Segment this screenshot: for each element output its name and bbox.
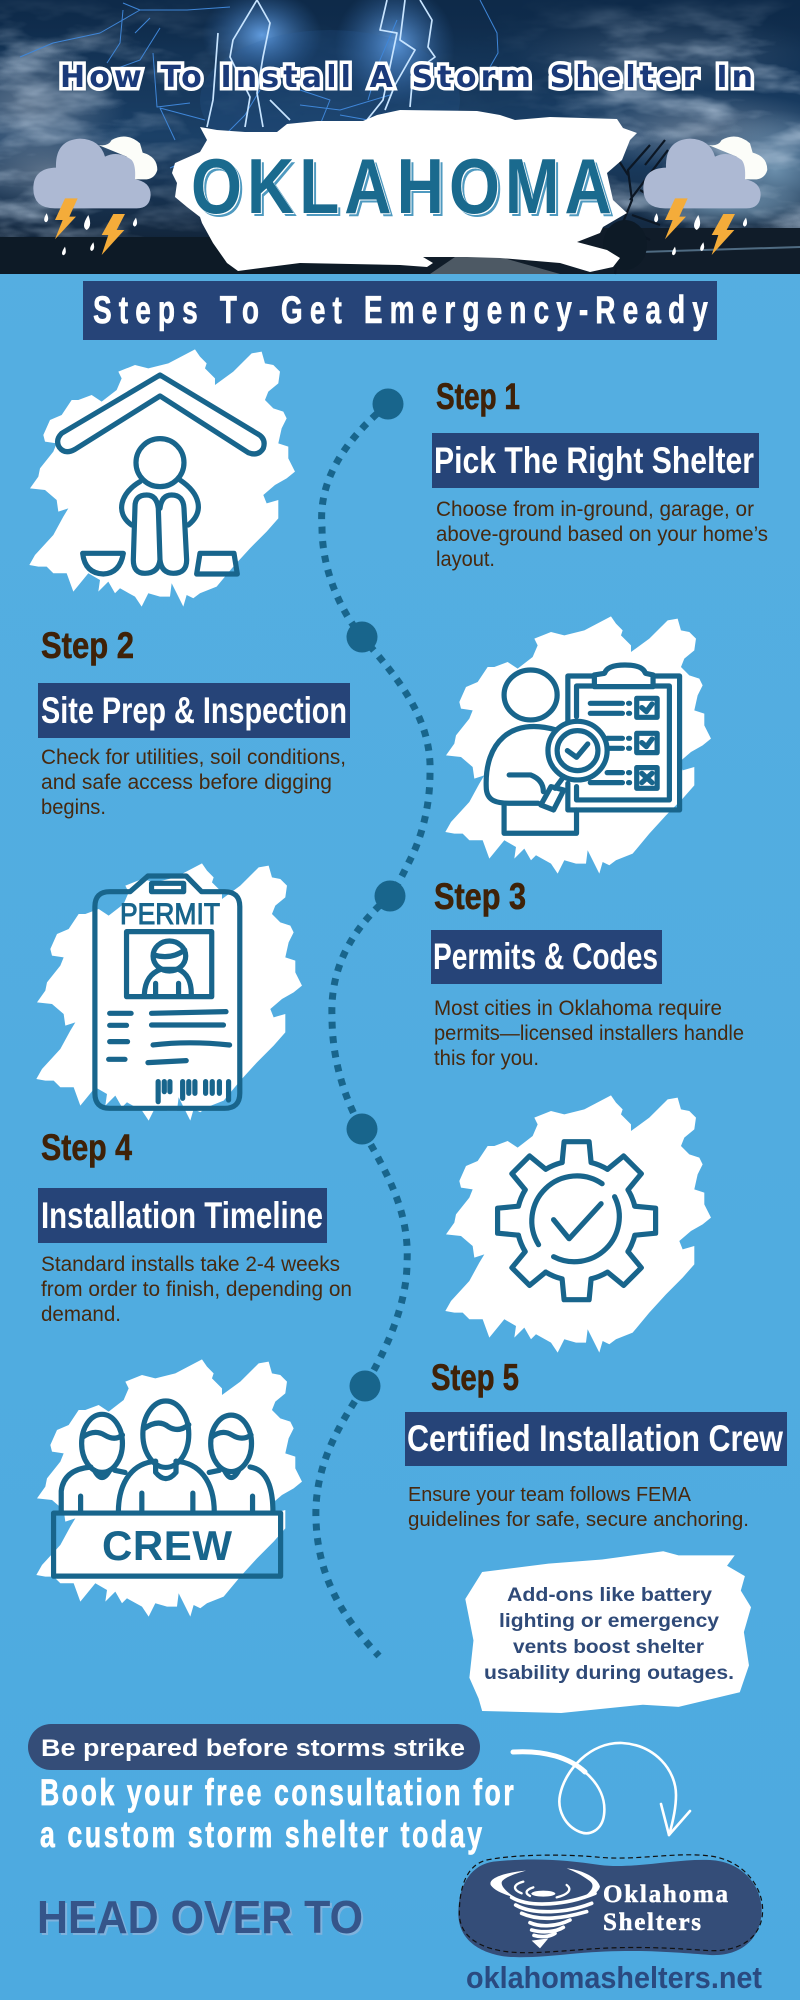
step 3 heading: Permits & Codes xyxy=(433,936,658,977)
logo wordmark xyxy=(603,1881,728,1936)
step 2 description: begins. xyxy=(41,795,106,819)
icon: right storm cloud xyxy=(643,137,767,255)
step 5 description: guidelines for safe, secure anchoring. xyxy=(408,1509,749,1531)
step 5 label: Step 5 xyxy=(431,1357,519,1398)
callout: add-ons note: vents boost shelter xyxy=(513,1636,704,1658)
state name: OKLAHOMA xyxy=(191,144,612,230)
step 2 heading: Site Prep & Inspection xyxy=(41,690,347,731)
step 3 label: Step 3 xyxy=(434,876,526,917)
step 1 description: layout. xyxy=(436,547,495,571)
state name: OKLAHOMA xyxy=(194,147,615,233)
panel: step 5 icon, crew xyxy=(36,1359,302,1617)
step 4 description xyxy=(41,1252,352,1326)
icon: tornado xyxy=(490,1868,600,1948)
panel: step 4 text xyxy=(38,1127,352,1326)
head over to text: HEAD OVER TO xyxy=(37,1891,363,1943)
step 3 description: Most cities in Oklahoma require xyxy=(434,996,722,1020)
step 5 description: Ensure your team follows FEMA xyxy=(408,1484,692,1506)
step 5 description xyxy=(408,1484,749,1531)
head over to text: HEAD OVER TO xyxy=(39,1893,365,1945)
call to action text: Book your free consultation for xyxy=(40,1772,514,1813)
step 3 description xyxy=(434,996,744,1070)
logo badge xyxy=(458,1855,763,1957)
step 3 description: this for you. xyxy=(434,1046,539,1070)
storm sky photo xyxy=(0,0,800,274)
callout: add-ons note: Add-ons like battery xyxy=(507,1584,712,1606)
step 1 label: Step 1 xyxy=(436,376,520,417)
lightning bolts xyxy=(20,0,498,168)
title line: How To Install A Storm Shelter In xyxy=(60,60,753,95)
panel: step 4 icon, gear with check xyxy=(445,1095,711,1353)
step 2 heading xyxy=(38,683,350,738)
subtitle banner: Steps To Get Emergency-Ready xyxy=(93,289,708,332)
callout: add-ons note: lighting or emergency xyxy=(499,1610,719,1632)
step 4 heading: Installation Timeline xyxy=(41,1195,323,1236)
step 3 heading xyxy=(431,930,662,984)
header banner xyxy=(0,0,800,274)
step 1 description xyxy=(436,497,768,571)
call to action pill: Be prepared before storms strike xyxy=(41,1735,465,1762)
call to action text: a custom storm shelter today xyxy=(40,1814,482,1855)
arrow: looping arrow to logo xyxy=(513,1743,690,1835)
state name: OKLAHOMA xyxy=(192,145,613,231)
step 2 description: and safe access before digging xyxy=(41,770,332,794)
timeline: dashed path with step dots xyxy=(316,388,430,1656)
panel: step 1 text xyxy=(432,376,768,571)
permit wording: PERMIT xyxy=(120,898,220,931)
step 4 description: Standard installs take 2-4 weeks xyxy=(41,1252,340,1276)
panel: step 2 icon, inspector with clipboard xyxy=(445,616,711,874)
panel: step 5 text xyxy=(405,1357,787,1531)
call to action text xyxy=(40,1772,514,1855)
logo wordmark: Oklahoma xyxy=(603,1881,728,1908)
panel: step 3 text xyxy=(431,876,744,1070)
step 2 label: Step 2 xyxy=(41,625,134,666)
white brush behind state name xyxy=(172,110,637,272)
step 1 heading xyxy=(432,433,759,488)
step 2 description xyxy=(41,745,346,819)
website url: oklahomashelters.net xyxy=(466,1960,762,1995)
panel: step 2 text xyxy=(38,625,350,819)
callout: add-ons note: usability during outages. xyxy=(484,1662,734,1684)
callout: add-ons note xyxy=(465,1551,751,1713)
step 2 description: Check for utilities, soil conditions, xyxy=(41,745,346,769)
call to action pill xyxy=(28,1724,480,1770)
panel: step 3 icon, permit badge xyxy=(36,863,302,1121)
logo wordmark: Shelters xyxy=(603,1909,701,1936)
step 4 description: demand. xyxy=(41,1302,121,1326)
panel: step 1 icon, person sheltering xyxy=(29,349,295,607)
crew sign wording: CREW xyxy=(102,1522,232,1569)
icon: left storm cloud xyxy=(33,137,157,255)
step 1 description: Choose from in-ground, garage, or xyxy=(436,497,754,521)
step 1 description: above-ground based on your home’s xyxy=(436,522,768,546)
step 3 description: permits—licensed installers handle xyxy=(434,1021,744,1045)
step 4 description: from order to finish, depending on xyxy=(41,1277,352,1301)
step 4 label: Step 4 xyxy=(41,1127,132,1168)
step 4 heading xyxy=(38,1188,327,1243)
